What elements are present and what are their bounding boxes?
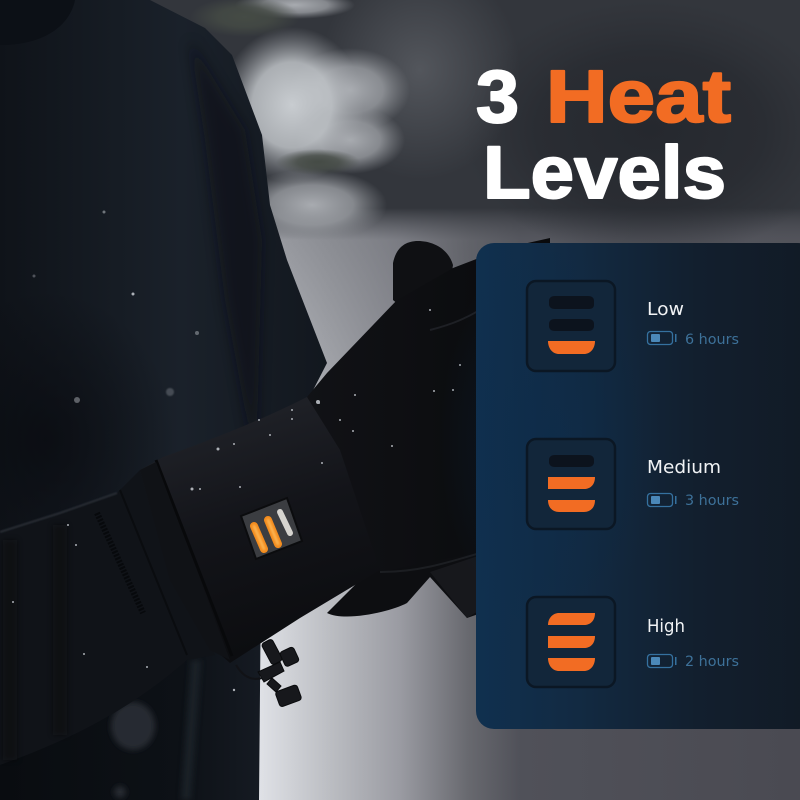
battery: 6 hours: 6 hours [685, 332, 739, 348]
collar [0, 0, 75, 45]
heat level: medium [527, 439, 739, 529]
forearm sleeve [0, 470, 215, 765]
icon: medium level [527, 439, 615, 529]
title: 3 [476, 55, 519, 138]
glove thumb [393, 241, 453, 310]
battery: 2 hours: 2 hours [685, 654, 739, 670]
lower torso [0, 650, 259, 800]
battery: 3 hours [648, 493, 739, 509]
battery: 2 hours [648, 654, 739, 670]
glove hand [307, 238, 550, 610]
label: medium: Medium [647, 458, 721, 478]
panel: heat levels [440, 240, 800, 729]
title: Heat [546, 55, 731, 138]
person: dark long-sleeve shirt [0, 0, 327, 800]
drawcord toggle [236, 639, 302, 707]
label: high: High [647, 617, 685, 637]
ghosted glove behind panel [440, 240, 660, 640]
glove cuff [140, 397, 380, 663]
glove heat control button [241, 498, 302, 559]
title [476, 55, 731, 214]
glove [140, 238, 550, 707]
battery: 3 hours: 3 hours [685, 493, 739, 509]
title: Levels [483, 131, 726, 214]
label: low: Low [647, 300, 684, 320]
icon: high level [527, 597, 615, 687]
icon: low level [527, 281, 615, 371]
glove lower hand [327, 540, 490, 618]
heat level: low [527, 281, 739, 371]
battery: 6 hours [648, 332, 739, 348]
heat level: high [527, 597, 739, 687]
snow specks [12, 210, 461, 691]
